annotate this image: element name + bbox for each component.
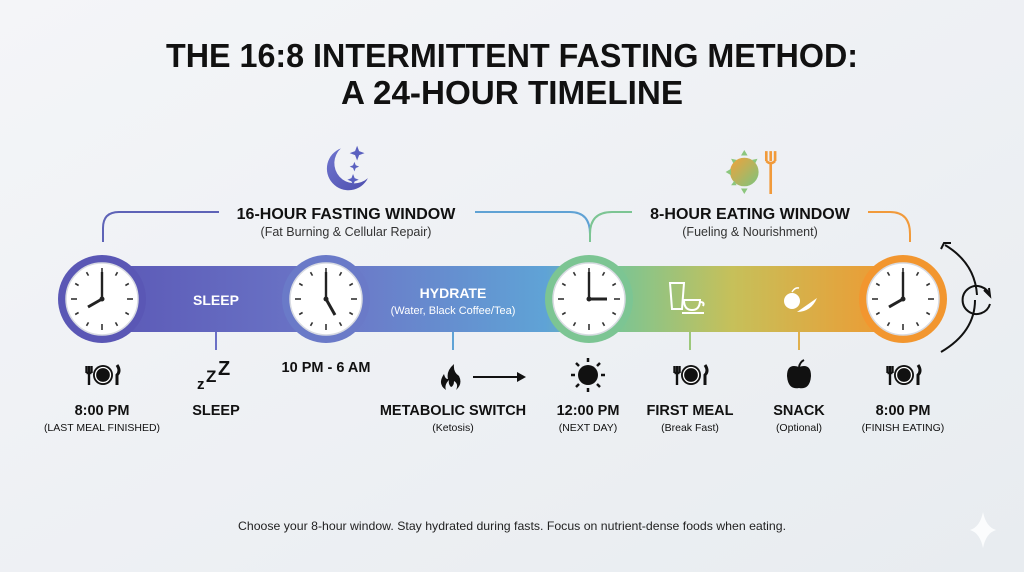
heading: fasting window: 16-HOUR FASTING WINDOW [237,206,456,223]
clock: 8 PM [58,255,146,343]
labels: (Break Fast) [661,422,719,434]
icon: sun and fork [726,150,775,194]
icon: drinks [670,283,704,313]
labels: (Optional) [776,422,822,434]
timeline bar [100,266,910,332]
bar labels: HYDRATE [420,285,486,301]
labels: 8:00 PM [876,403,930,419]
label: 10 PM - 6 AM: 10 PM - 6 AM [282,360,370,376]
icon: zzz: Z [218,358,230,380]
icon: zzz: Z [206,367,216,386]
cycle arrows [941,243,990,352]
icon: plate finish [888,365,920,385]
icon: fire [441,364,460,390]
icon: plate 1 [86,365,119,385]
title [166,37,858,111]
heading: eating window: 8-HOUR EATING WINDOW [650,206,851,223]
heading: eating window [650,206,851,239]
bar labels [193,285,515,317]
heading: fasting window: (Fat Burning & Cellular Repair) [261,225,431,239]
clock: 8 PM finish [859,255,947,343]
labels: SLEEP [192,403,240,419]
labels: SNACK [773,403,825,419]
clock: 10 PM - 6 AM [282,255,370,343]
sparkle [970,512,996,548]
icon: apple [787,360,811,388]
labels: METABOLIC SWITCH [380,403,526,419]
labels: (Ketosis) [432,422,474,434]
labels: FIRST MEAL [646,403,734,419]
footer text: Choose your 8-hour window. Stay hydrated during fasts. Focus on nutrient-dense foods when eating. [238,519,786,533]
icon: zzz [197,358,230,393]
bar labels: SLEEP [193,292,239,308]
bar labels: (Water, Black Coffee/Tea) [391,305,515,317]
bracket: fasting window [103,212,590,242]
icon: plate meal [674,365,707,385]
title: THE 16:8 INTERMITTENT FASTING METHOD: [166,37,858,74]
labels [44,403,944,434]
labels: (FINISH EATING) [862,422,944,434]
icon: sun [571,358,605,392]
labels: (NEXT DAY) [559,422,617,434]
heading: fasting window [237,206,456,239]
arrow [473,372,526,382]
icon: moon [327,146,368,190]
labels: 12:00 PM [557,403,619,419]
icon: fruits [784,288,817,312]
title: A 24-HOUR TIMELINE [341,74,683,111]
icon: zzz: z [197,376,204,393]
heading: eating window: (Fueling & Nourishment) [682,225,818,239]
labels: 8:00 PM [75,403,129,419]
labels: (LAST MEAL FINISHED) [44,422,160,434]
connectors [216,332,799,350]
bracket: eating window [590,212,910,242]
clock: 12 PM [545,255,633,343]
